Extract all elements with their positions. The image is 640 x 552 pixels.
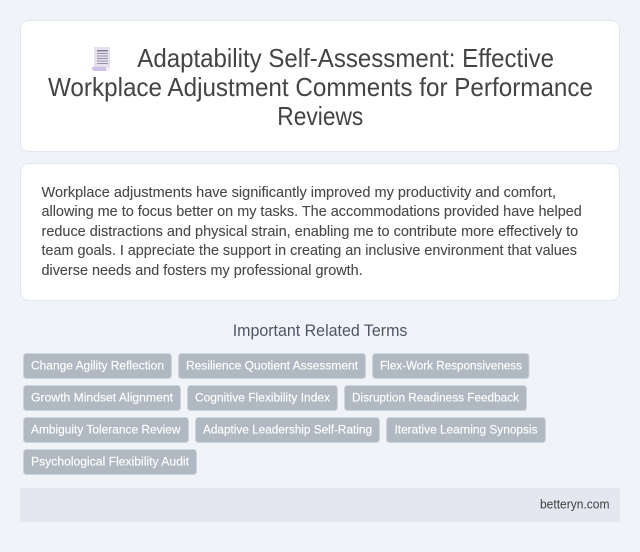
- tag: Resilience Quotient Assessment: [186, 358, 359, 372]
- tag: [196, 418, 380, 442]
- text block: comment: Workplace adjustments have significantly improved my productivity and comfort,: [42, 185, 556, 201]
- title: Workplace Adjustment Comments for Performance: [48, 72, 593, 102]
- tag: [372, 354, 529, 378]
- panel: comment text: [20, 164, 620, 300]
- text block: comment: allowing me to focus better on my tasks. The accommodations provided have helped: [42, 204, 582, 220]
- tag: [24, 450, 196, 474]
- icon: receipt scroll: [92, 47, 110, 71]
- footer: [20, 488, 620, 522]
- tag: Iterative Learning Synopsis: [394, 422, 538, 436]
- tag: [344, 386, 526, 410]
- tag: Psychological Flexibility Audit: [31, 454, 190, 468]
- tag: [24, 418, 188, 442]
- tag: Cognitive Flexibility Index: [195, 390, 331, 404]
- tag: Adaptive Leadership Self-Rating: [203, 422, 372, 436]
- title: Reviews: [277, 101, 363, 131]
- tag: Change Agility Reflection: [31, 358, 164, 372]
- tag: Disruption Readiness Feedback: [352, 390, 520, 404]
- title: [48, 43, 593, 131]
- tag: [188, 386, 338, 410]
- panel: title card: [20, 20, 620, 152]
- tag: Ambiguity Tolerance Review: [31, 422, 181, 436]
- text block: comment: diverse needs and fosters my professional growth.: [42, 263, 363, 279]
- text block: comment: [42, 185, 582, 279]
- tag: Flex-Work Responsiveness: [380, 358, 522, 372]
- tag: [386, 418, 546, 442]
- footer: betteryn.com: [540, 496, 610, 512]
- text block: comment: reduce distractions and physical strain, enabling me to contribute more effectively to: [42, 224, 578, 240]
- tag: [24, 386, 180, 410]
- text block: comment: team goals. I appreciate the support in creating an inclusive environment that values: [42, 243, 577, 259]
- heading: related terms: Important Related Terms: [233, 322, 407, 340]
- title: Adaptability Self-Assessment: Effective: [137, 43, 554, 73]
- tag: [24, 354, 172, 378]
- tag list: [24, 354, 546, 474]
- tag: Growth Mindset Alignment: [31, 390, 174, 404]
- tag: [178, 354, 366, 378]
